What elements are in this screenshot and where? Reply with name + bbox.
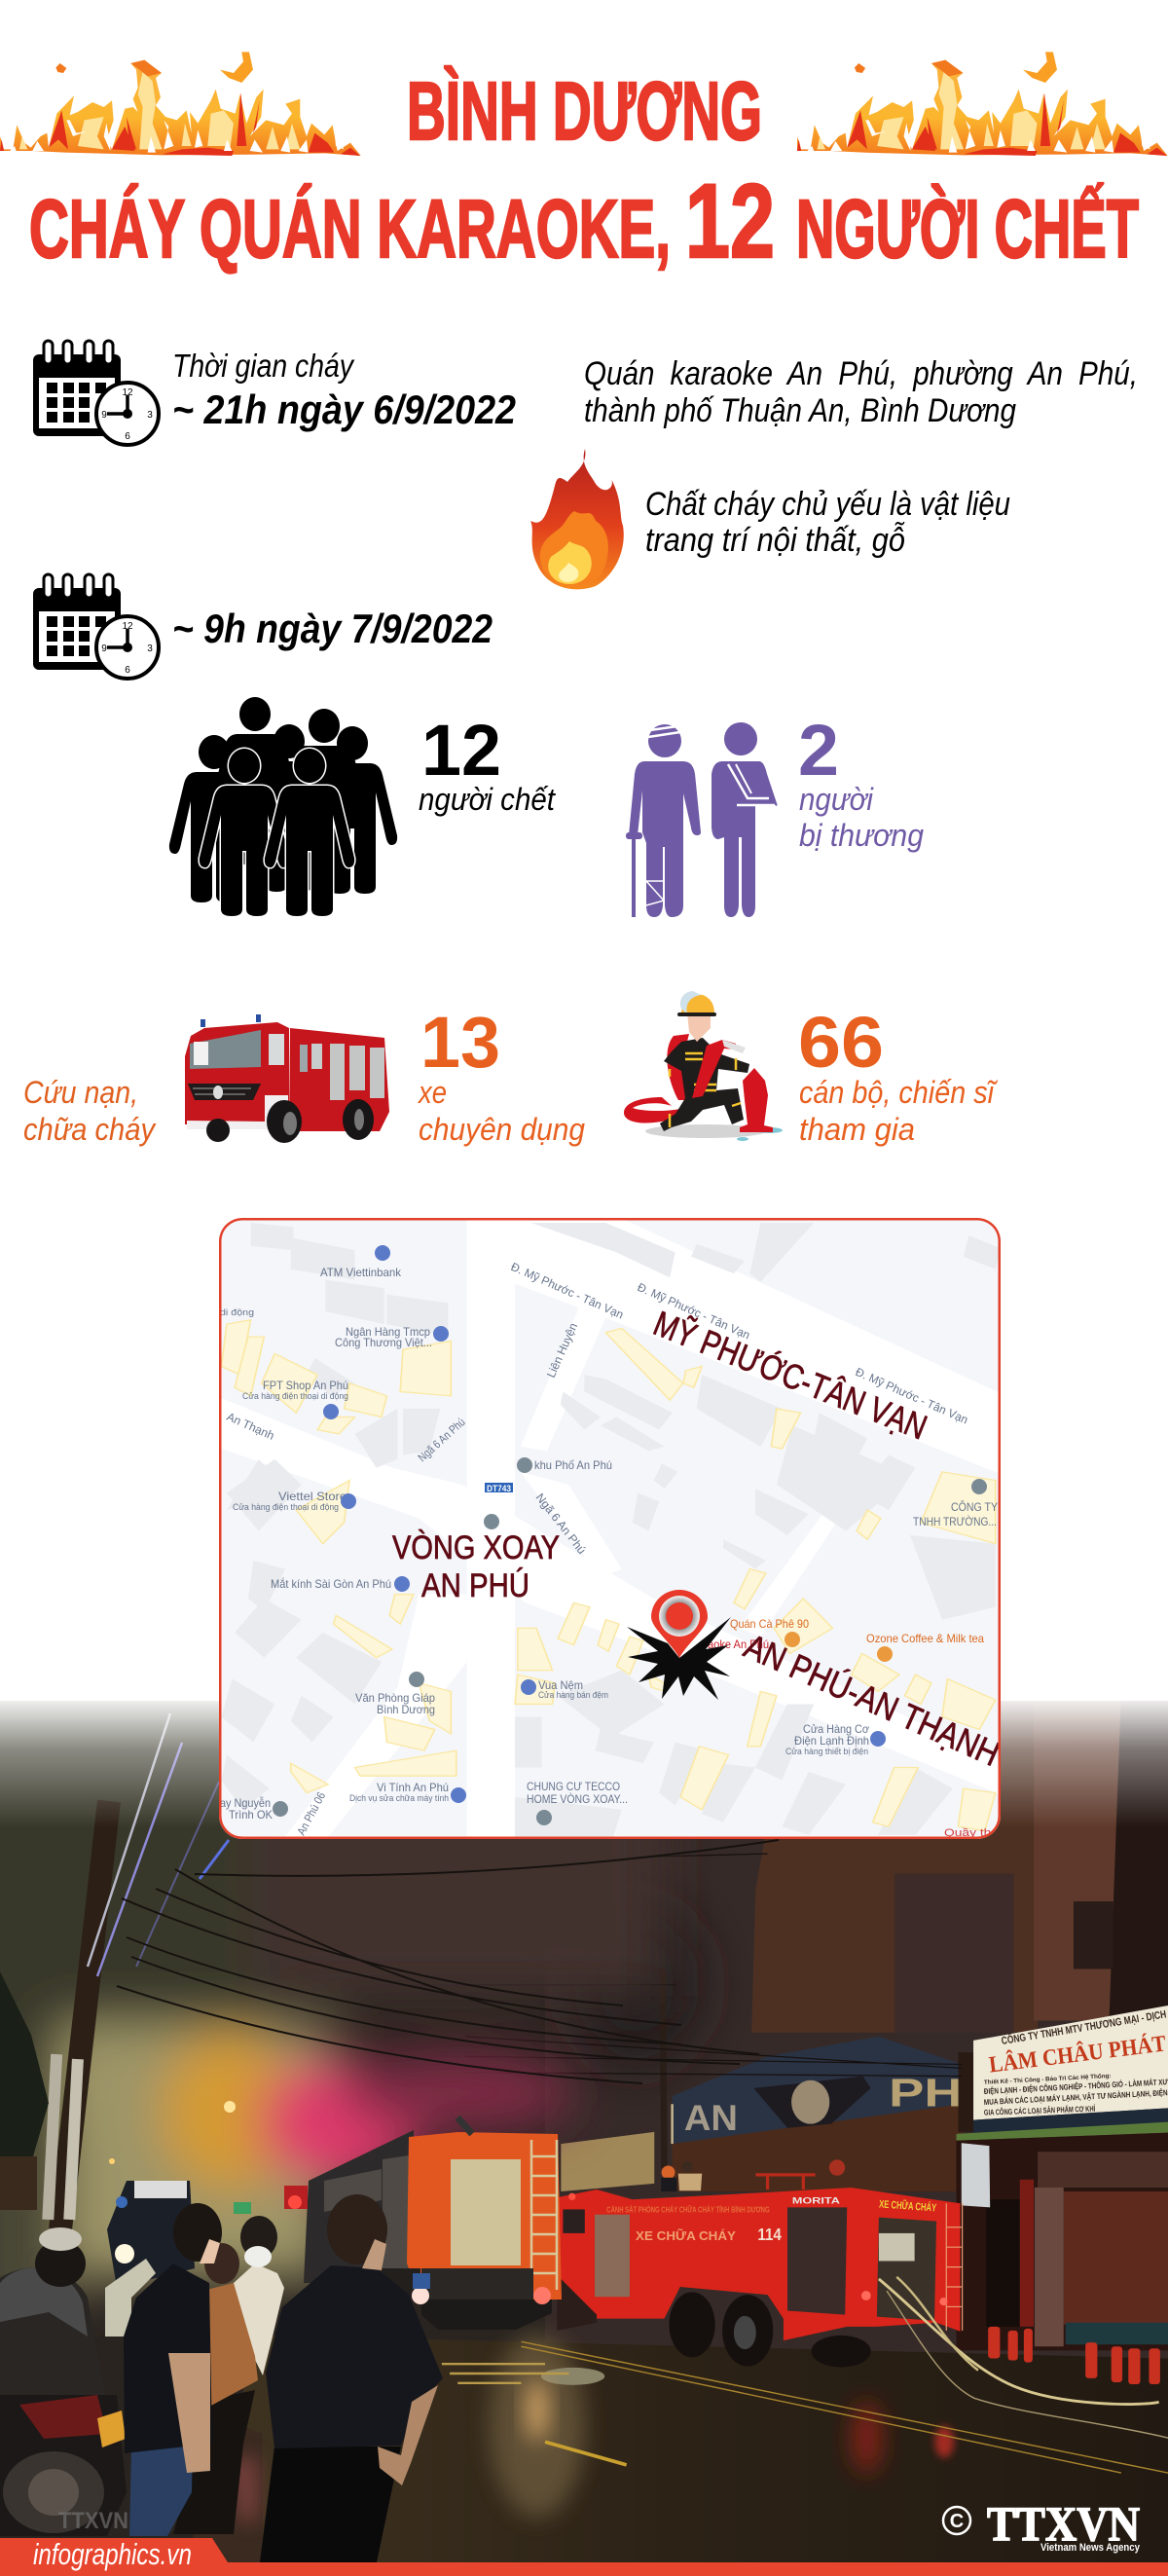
footer bar: infographics.vn	[33, 2537, 192, 2571]
icon: injured people	[626, 722, 778, 917]
title: 12	[685, 162, 775, 279]
photo: fire scene at night: AN	[684, 2098, 738, 2138]
map small labels: Ngã 6 An Phú	[533, 1490, 589, 1557]
map small labels: Cửa Hàng Cơ	[803, 1722, 869, 1736]
map small labels: Ngân Hàng Tmcp	[346, 1325, 430, 1339]
road surface	[243, 2335, 1168, 2576]
text: fire start time: Thời gian cháy	[172, 348, 355, 384]
pavement reflections	[193, 2451, 243, 2562]
map small labels: Điện Lạnh Định	[794, 1734, 869, 1748]
logo: TTXVN: Vietnam News Agency	[1040, 2542, 1141, 2554]
orange fire truck	[284, 2117, 562, 2330]
photo: fire scene at night: 114	[757, 2225, 782, 2244]
logo: TTXVN	[943, 2496, 1141, 2554]
title: BÌNH DƯƠNG	[407, 65, 762, 157]
woman in floral blouse	[173, 2243, 258, 2534]
text: fire end time: ~ 9h ngày 7/9/2022	[172, 606, 493, 651]
map small labels: Đ. Mỹ Phước - Tân Vạn	[854, 1365, 970, 1427]
stat: vehicles: 13	[420, 1002, 500, 1083]
map small labels: Quầy thu	[944, 1827, 999, 1839]
map small labels: Bình Dương	[377, 1703, 435, 1716]
stat: injured: người	[799, 782, 874, 817]
map small labels: aoke An Phú	[708, 1638, 769, 1651]
stat: personnel: cán bộ, chiến sĩ	[799, 1075, 998, 1110]
stat: vehicles	[417, 1002, 585, 1147]
map small labels: Dịch vụ sửa chữa máy tính	[349, 1793, 449, 1803]
motorbike	[0, 2395, 127, 2536]
map small labels: Liên Huyện	[544, 1321, 580, 1380]
map small labels: ay Nguyễn	[220, 1795, 271, 1810]
stat: personnel: 66	[798, 1002, 884, 1083]
photo: fire scene at night: Thiết Kế - Thi Công - Bảo Trì Các Hệ Thống:	[984, 2073, 1112, 2086]
flames: top left	[0, 52, 361, 156]
map small labels	[220, 1245, 999, 1839]
hoses	[879, 2277, 1168, 2438]
distant fire truck	[105, 2181, 251, 2337]
map small labels: khu Phố An Phú	[534, 1458, 612, 1472]
icon: flame	[530, 449, 624, 589]
map small labels: Văn Phòng Giáp	[355, 1691, 435, 1705]
stat: vehicles: xe	[417, 1075, 447, 1110]
text: burning material	[645, 486, 1010, 559]
map small labels: Cửa hàng điện thoại di động	[233, 1502, 339, 1512]
person with backpack	[0, 2227, 91, 2337]
map small labels: An Thạnh	[225, 1410, 276, 1443]
map small labels: Cửa hàng bán đệm	[538, 1690, 608, 1700]
map small labels: Vua Nệm	[538, 1678, 583, 1692]
map small labels: Đ. Mỹ Phước - Tân Vạn	[509, 1260, 626, 1322]
stat: personnel: tham gia	[799, 1112, 915, 1147]
map small labels: Quán Cà Phê 90	[730, 1617, 809, 1631]
map small labels: Ngã 6 An Phú	[416, 1416, 468, 1464]
map small labels: TNHH TRƯỜNG...	[913, 1514, 997, 1528]
map road label: An Phu - An Thanh: AN PHÚ-AN THẠNH	[739, 1626, 1005, 1774]
map small labels: An Phú 06	[294, 1789, 328, 1837]
icon: group of people	[169, 697, 397, 916]
text: location: thành phố Thuận An, Bình Dương	[584, 392, 1016, 429]
map small labels: di động	[220, 1307, 254, 1317]
flames: top right	[797, 52, 1168, 156]
footer bar	[0, 2537, 1168, 2576]
map small labels: Công Thương Việt...	[335, 1336, 432, 1349]
photo: fire scene at night: PH	[889, 2070, 963, 2115]
map small labels: Viettel Store	[278, 1490, 347, 1503]
stat: injured: 2	[798, 710, 839, 791]
map small labels: ATM Viettinbank	[320, 1266, 402, 1279]
map panel	[0, 1218, 1168, 2576]
photo: fire scene at night: MORITA	[792, 2195, 841, 2205]
icon: firefighter	[624, 991, 783, 1141]
map small labels: Vi Tính An Phú	[377, 1781, 449, 1794]
title: CHÁY QUÁN KARAOKE,	[29, 183, 671, 275]
photo: fire scene at night: XE CHỮA CHÁY	[636, 2228, 736, 2243]
stat: deaths	[419, 710, 556, 817]
map small labels: Mắt kính Sài Gòn An Phú	[271, 1576, 391, 1591]
stat: injured	[798, 710, 924, 853]
icon: calendar and clock, fire start	[33, 341, 159, 445]
map small labels: Đ. Mỹ Phước - Tân Vạn	[636, 1280, 752, 1343]
map small labels: Trình OK	[229, 1808, 273, 1822]
map label: An Phu roundabout: VÒNG XOAY	[392, 1529, 560, 1566]
logo: TTXVN: C	[950, 2511, 964, 2532]
man in black shirt	[124, 2203, 222, 2536]
photo: fire scene at night: XE CHỮA CHÁY	[879, 2197, 937, 2215]
truck	[557, 2188, 961, 2340]
person in white shirt with mask	[234, 2216, 284, 2375]
stat: personnel	[798, 1002, 998, 1147]
photo: fire scene at night: TTXVN	[58, 2508, 128, 2534]
logo: TTXVN: TTXVN	[987, 2496, 1140, 2551]
map small labels: Ozone Coffee & Milk tea	[866, 1632, 984, 1645]
text: burning material: Chất cháy chủ yếu là vật liệu	[645, 486, 1010, 523]
icon: fire truck	[185, 1014, 389, 1143]
map small labels: Cửa hàng điện thoại di động	[242, 1391, 348, 1401]
photo: fire scene at night: GIA CÔNG CÁC LOẠI SẢN PHẨM CƠ KHÍ	[984, 2103, 1096, 2117]
map label: An Phu roundabout	[392, 1529, 560, 1604]
fog and street lights	[0, 1655, 662, 2317]
map small labels: HOME VÒNG XOAY...	[527, 1791, 628, 1806]
icon: explosion burst	[627, 1617, 731, 1700]
icon: location pin	[651, 1590, 708, 1658]
title	[29, 65, 1139, 279]
wires and pole	[42, 1713, 779, 2229]
text: fire start time: ~ 21h ngày 6/9/2022	[172, 386, 516, 432]
photo fade into white	[0, 1701, 1168, 1827]
label: rescue	[23, 1075, 157, 1147]
map small labels: FPT Shop An Phú	[263, 1379, 348, 1392]
stat: deaths: 12	[421, 710, 501, 791]
text: fire start time	[172, 348, 516, 432]
text: burning material: trang trí nội thất, gỗ	[645, 522, 905, 559]
stat: vehicles: chuyên dụng	[419, 1112, 585, 1147]
stat: deaths: người chết	[419, 782, 556, 817]
map small labels: Cửa hàng thiết bị điện	[785, 1747, 868, 1756]
man in front	[260, 2194, 443, 2562]
stat: injured: bị thương	[799, 818, 924, 853]
label: rescue: chữa cháy	[23, 1112, 157, 1147]
map small labels: CÔNG TY	[951, 1499, 998, 1514]
text: location	[584, 355, 1138, 429]
map small labels: DT743	[487, 1484, 511, 1493]
photo: fire scene at night	[0, 1655, 1168, 2576]
map road label: My Phuoc - Tan Van: MỸ PHƯỚC-TÂN VẠN	[648, 1303, 932, 1448]
photo: fire scene at night: CẢNH SÁT PHÒNG CHÁY CHỮA CHÁY TỈNH BÌNH DƯƠNG	[606, 2203, 770, 2214]
map label: An Phu roundabout: AN PHÚ	[421, 1567, 529, 1604]
label: rescue: Cứu nạn,	[23, 1075, 138, 1110]
icon: calendar and clock, fire end	[33, 574, 159, 679]
map small labels: CHUNG CƯ TECCO	[527, 1780, 620, 1793]
